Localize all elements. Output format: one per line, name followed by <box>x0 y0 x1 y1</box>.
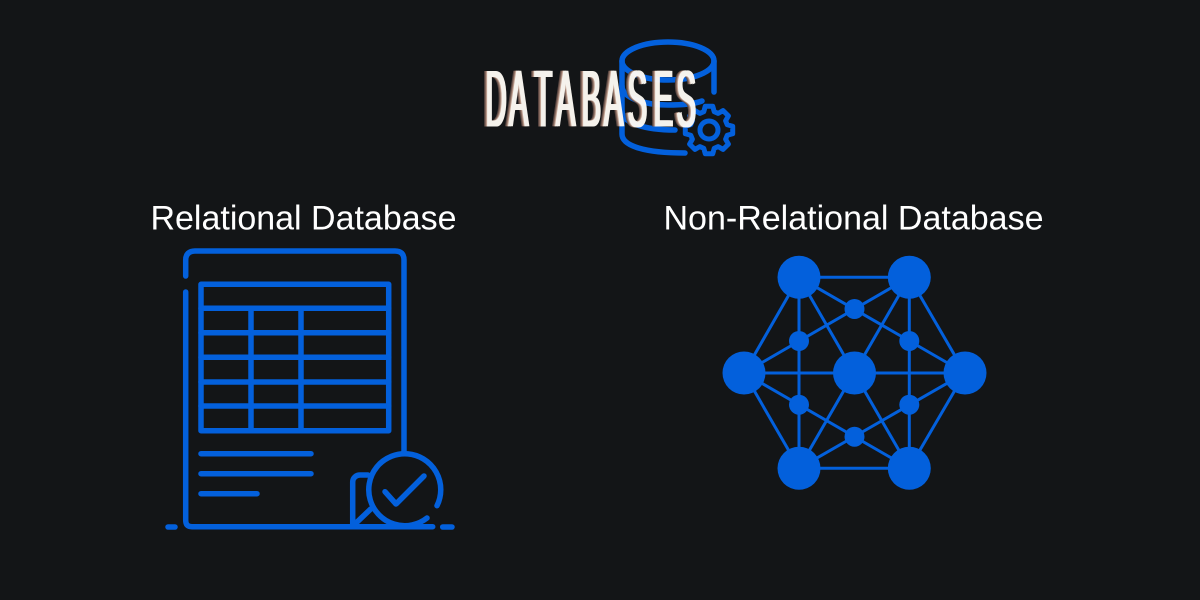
title: DATABASES <box>483 54 693 144</box>
table grid <box>201 284 389 431</box>
check badge <box>369 454 441 526</box>
title: DATABASES <box>484 54 694 144</box>
title: DATABASES <box>482 54 692 144</box>
icon: database with gear <box>622 42 733 154</box>
icon: relational table document <box>168 251 452 527</box>
icon: network graph <box>722 256 986 490</box>
heading: relational database: Relational Database <box>150 200 456 238</box>
document outline <box>186 251 404 453</box>
folded tab <box>353 475 371 526</box>
ground dashes <box>168 524 452 530</box>
icon: gear <box>685 106 733 154</box>
connections <box>744 277 965 468</box>
heading: non-relational database: Non-Relational Database <box>664 200 1044 238</box>
nodes <box>722 256 986 490</box>
title: DATABASES <box>487 54 697 144</box>
title: DATABASES <box>485 54 695 144</box>
text lines <box>201 454 311 494</box>
